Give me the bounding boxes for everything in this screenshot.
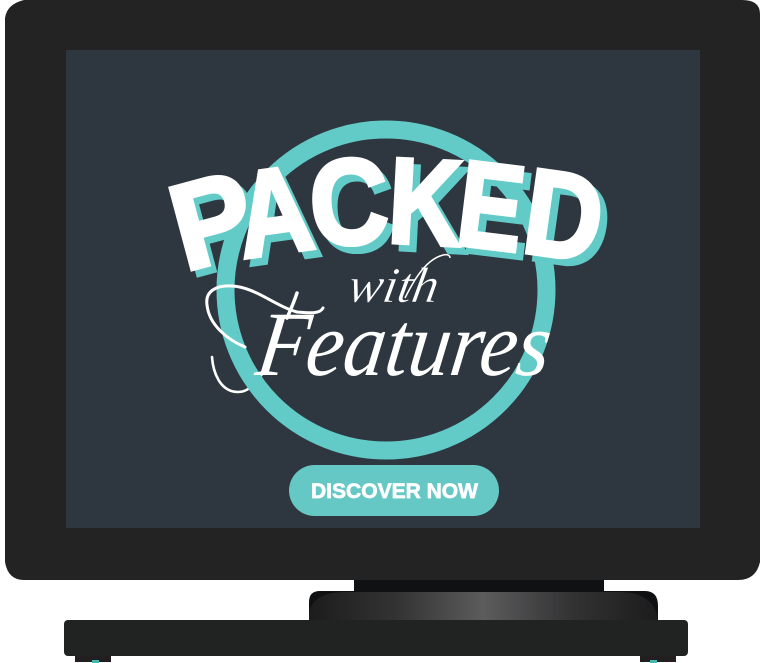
tail of the F swash, behind the ring xyxy=(212,357,262,392)
top extension of the F stem xyxy=(287,293,297,318)
monitor stand xyxy=(64,575,688,663)
button: discover now: DISCOVER NOW xyxy=(311,480,478,503)
headline: PACKED xyxy=(156,132,619,303)
headline letters: E xyxy=(450,136,532,278)
stand puck xyxy=(309,591,658,622)
headline shadow xyxy=(162,139,619,303)
screen xyxy=(66,50,700,528)
headline letters: C xyxy=(306,132,392,272)
stand neck xyxy=(354,575,604,595)
headline letters: P xyxy=(156,144,268,297)
headline shadow: A xyxy=(234,146,327,291)
teal ring xyxy=(226,130,546,450)
headline letters: D xyxy=(516,143,612,289)
headline letters: A xyxy=(228,139,321,284)
headline shadow: C xyxy=(312,139,398,279)
headline shadow: P xyxy=(162,150,274,303)
subheading: Features: Features xyxy=(250,294,558,396)
stand feet xyxy=(75,654,676,663)
headline letters xyxy=(156,132,612,297)
stand base xyxy=(64,620,688,656)
headline letters: K xyxy=(385,132,465,272)
swash on the F xyxy=(207,286,323,347)
headline shadow: E xyxy=(457,143,539,285)
headline shadow: K xyxy=(392,139,472,279)
headline shadow: D xyxy=(523,150,619,296)
subheading: with: with xyxy=(344,257,444,313)
button: discover now xyxy=(289,465,499,516)
flourish on the h of with xyxy=(405,255,450,298)
